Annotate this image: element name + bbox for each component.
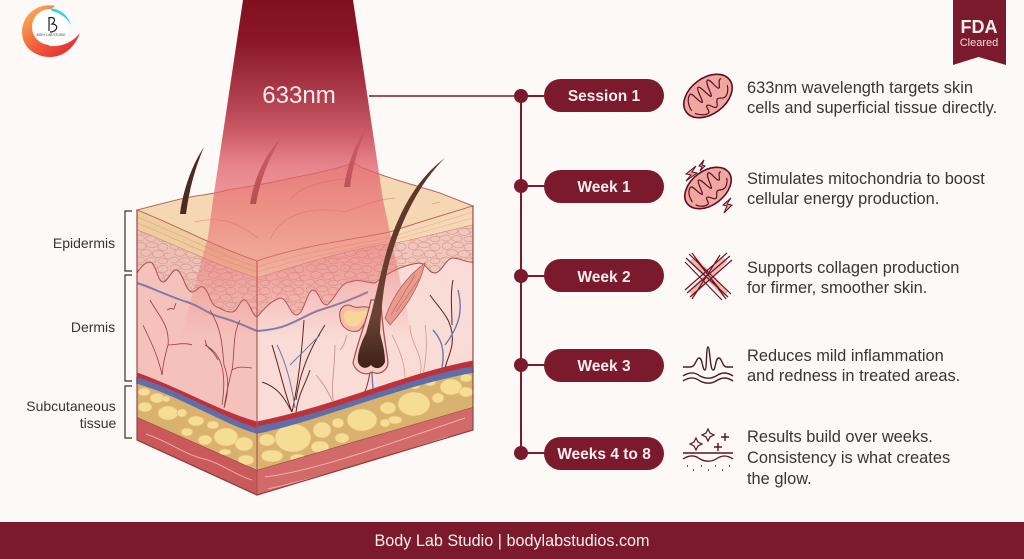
pill: week 1 — [544, 170, 664, 203]
text: weeks 4 to 8 description — [747, 428, 950, 488]
text: week 2 description — [747, 259, 959, 297]
skin surface creases — [195, 178, 440, 240]
right muscle — [257, 407, 473, 495]
right cell layer — [257, 225, 473, 325]
right face — [257, 206, 473, 495]
bracket: subcutaneous — [125, 386, 132, 438]
text: weeks 4 to 8 description: the glow. — [747, 470, 812, 488]
icon: skin glow sparkles — [683, 429, 733, 470]
hair muscle — [385, 263, 425, 325]
wavelength label: 633nm — [262, 82, 336, 109]
timeline — [514, 89, 545, 460]
pill: week 3 — [544, 349, 664, 382]
pill: weeks 4 to 8 — [544, 437, 664, 470]
text: session 1 description: 633nm wavelength targets skin — [747, 79, 973, 97]
hair follicle — [353, 300, 388, 374]
pill: week 2: Week 2 — [577, 269, 631, 286]
text: week 1 description: Stimulates mitochondria to boost — [747, 170, 985, 188]
icon: energised mitochondrion — [677, 159, 739, 217]
badge: FDA cleared: FDA — [960, 17, 998, 37]
pill: weeks 4 to 8: Weeks 4 to 8 — [557, 446, 651, 463]
skin cross-section diagram — [137, 0, 473, 495]
left red and blue bands — [137, 373, 257, 433]
label: subcutaneous tissue: tissue — [80, 415, 116, 431]
label: epidermis: Epidermis — [53, 235, 115, 251]
hair: left outer — [180, 147, 204, 214]
right fat layer — [257, 372, 473, 470]
text: session 1 description: cells and superficial tissue directly. — [747, 99, 997, 117]
left fat layer — [137, 383, 257, 470]
footer bar — [0, 522, 1024, 559]
label: subcutaneous tissue — [26, 398, 116, 431]
badge: FDA cleared: Cleared — [960, 37, 998, 49]
text: week 3 description: and redness in treated areas. — [747, 367, 960, 385]
text: week 3 description — [747, 347, 960, 385]
logo: BODY LAB STUDIO — [37, 33, 66, 37]
right epidermis top band — [257, 206, 473, 278]
front base outline — [137, 206, 473, 495]
icon: mitochondrion — [676, 65, 740, 127]
label: dermis: Dermis — [71, 319, 115, 335]
text: week 3 description: Reduces mild inflammation — [747, 347, 944, 365]
footer bar: Body Lab Studio | bodylabstudios.com — [374, 532, 650, 550]
hair: middle — [250, 138, 281, 204]
text: week 2 description: for firmer, smoother skin. — [747, 279, 927, 297]
red light beam — [180, 0, 413, 340]
logo — [22, 5, 80, 57]
left cell layer — [137, 230, 257, 317]
text: week 1 description — [747, 170, 985, 208]
hair: right — [344, 126, 367, 187]
left muscle — [137, 417, 257, 495]
text: session 1 description — [747, 79, 997, 117]
right dermis — [257, 258, 473, 422]
bracket: epidermis — [125, 211, 132, 271]
text: week 2 description: Supports collagen production — [747, 259, 959, 277]
left blood vessel — [137, 283, 257, 331]
pill: week 3: Week 3 — [577, 358, 631, 375]
pill: week 1: Week 1 — [577, 179, 631, 196]
large hair with root — [358, 158, 445, 368]
pill: week 2 — [544, 259, 664, 292]
label: subcutaneous tissue: Subcutaneous — [26, 398, 116, 414]
left capillaries — [143, 300, 252, 408]
text: week 1 description: cellular energy production. — [747, 190, 939, 208]
right blood vessel — [257, 292, 368, 331]
icon: collagen fibres — [685, 253, 732, 300]
right capillaries — [262, 280, 460, 412]
connector from beam to timeline — [369, 95, 521, 97]
top surface — [137, 163, 473, 261]
left dermis — [137, 262, 257, 422]
badge: FDA cleared — [953, 0, 1006, 65]
text: weeks 4 to 8 description: Results build over weeks. — [747, 428, 933, 446]
left epidermis top band — [137, 210, 257, 278]
right red and blue bands — [257, 361, 473, 433]
bracket: dermis — [125, 275, 132, 381]
front corner edge — [256, 261, 258, 495]
left face — [137, 210, 257, 495]
pill: session 1: Session 1 — [568, 88, 641, 105]
text: weeks 4 to 8 description: Consistency is what creates — [747, 449, 950, 467]
icon: inflammation wave — [683, 347, 733, 383]
pill: session 1 — [544, 79, 664, 112]
sebaceous gland — [340, 305, 372, 331]
